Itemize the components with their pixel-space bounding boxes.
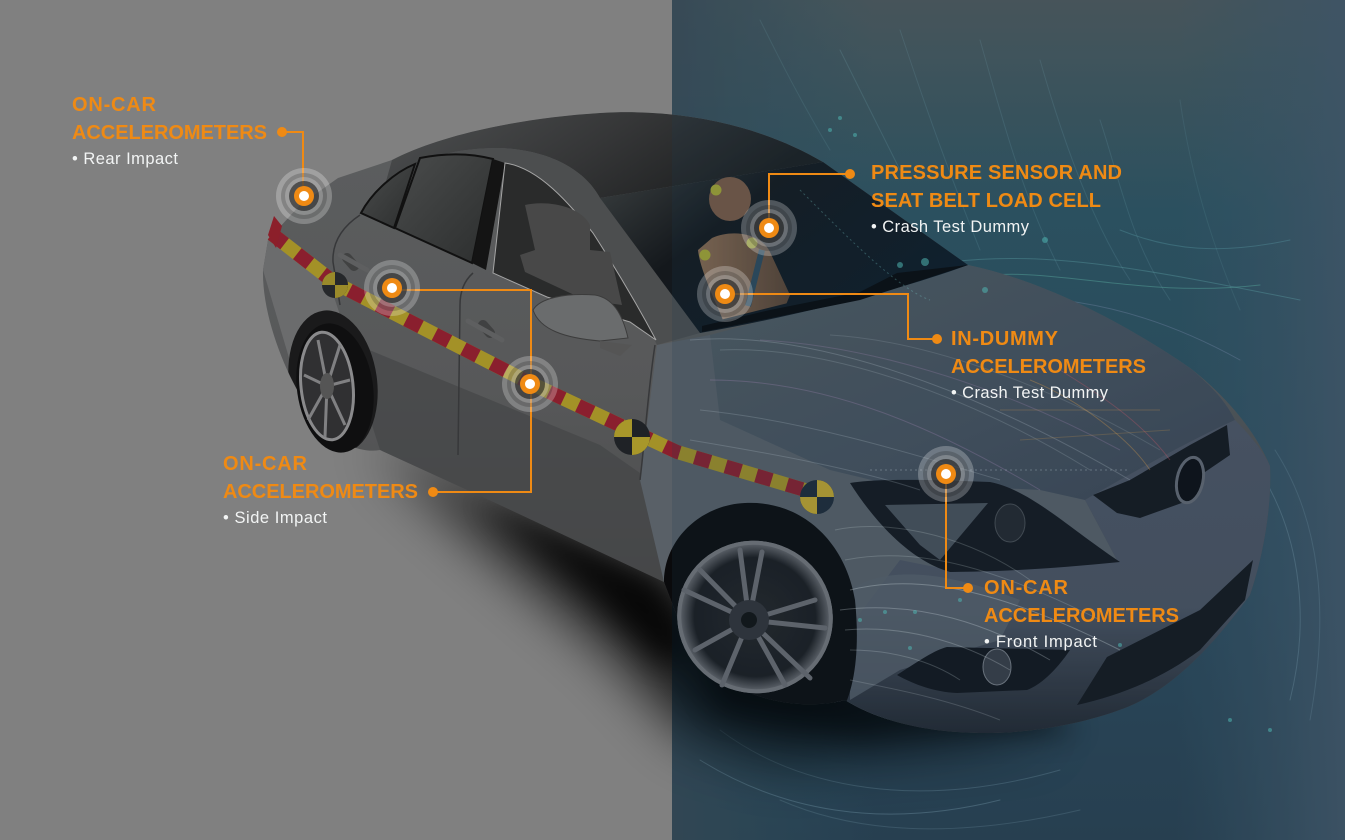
label: • Crash Test Dummy <box>871 218 1030 236</box>
seat <box>520 203 622 305</box>
door seams <box>333 215 655 480</box>
front bumper <box>845 420 1270 733</box>
roof panel <box>385 112 823 198</box>
label: SEAT BELT LOAD CELL <box>871 190 1101 212</box>
label: • Side Impact <box>223 509 327 527</box>
crash marker door <box>614 419 650 455</box>
label <box>871 162 1122 236</box>
sensor target <box>741 200 797 256</box>
lower air intake <box>897 560 1253 705</box>
sensor target lower <box>502 356 558 412</box>
car body shell <box>263 112 1270 733</box>
grille <box>1093 425 1230 518</box>
seat belt <box>748 250 762 306</box>
label: PRESSURE SENSOR AND <box>871 162 1122 184</box>
car <box>263 112 1270 735</box>
connector line <box>725 294 937 339</box>
connector dot <box>963 583 973 593</box>
sensor target upper <box>364 260 420 316</box>
dummy head <box>709 177 751 221</box>
label: • Front Impact <box>984 633 1097 651</box>
label <box>984 577 1179 651</box>
hood panel <box>710 265 1235 500</box>
A pillar and roof rail <box>412 148 700 345</box>
callout: rear impact sensor <box>72 94 332 224</box>
label: • Crash Test Dummy <box>951 384 1109 402</box>
callout: in-dummy accelerometers <box>697 266 1146 402</box>
rear rim <box>295 330 359 442</box>
connector dot <box>277 127 287 137</box>
door handles <box>340 255 502 340</box>
rear wheel arch <box>288 310 378 448</box>
label: IN-DUMMY <box>951 328 1059 350</box>
label: ACCELEROMETERS <box>984 605 1179 627</box>
lower flank darkening <box>370 350 641 490</box>
car ground shadow <box>370 440 1080 760</box>
label <box>223 453 418 527</box>
data particles <box>828 116 1272 732</box>
dummy shoulder marker <box>700 250 710 260</box>
dummy head marker <box>710 184 722 196</box>
windshield <box>600 162 968 333</box>
background: grey left half <box>0 0 672 840</box>
connector dot <box>845 169 855 179</box>
side mirror <box>533 295 632 356</box>
label: ACCELEROMETERS <box>951 356 1146 378</box>
label: ON-CAR <box>223 453 308 475</box>
label: ON-CAR <box>984 577 1069 599</box>
callout: pressure sensor and seat belt load cell <box>741 162 1122 256</box>
dummy chest marker <box>746 238 758 248</box>
crash marker fender <box>800 480 834 514</box>
connector line <box>946 474 968 588</box>
lower fender light <box>850 574 1020 700</box>
background: teal data field right half <box>672 0 1345 840</box>
label: ACCELEROMETERS <box>72 122 267 144</box>
callout: front impact sensor <box>918 446 1179 651</box>
connector dot <box>932 334 942 344</box>
callout: side impact sensors <box>223 260 558 527</box>
connector dot <box>428 487 438 497</box>
headlight <box>850 480 1120 572</box>
connector line <box>769 174 850 228</box>
front rim <box>656 519 854 715</box>
flow lines over car <box>690 190 1170 720</box>
rear flank light <box>263 240 340 358</box>
connector line <box>282 132 303 196</box>
sensor target <box>697 266 753 322</box>
label <box>951 328 1146 402</box>
rear tyre <box>288 318 382 458</box>
data streaks on background <box>700 20 1320 829</box>
sensor target <box>276 168 332 224</box>
label <box>72 94 267 168</box>
label: ON-CAR <box>72 94 157 116</box>
right half tint over car <box>672 0 1345 840</box>
front fender <box>640 335 1118 735</box>
label: • Rear Impact <box>72 150 178 168</box>
front wheel arch <box>664 503 857 715</box>
wipers <box>702 265 968 332</box>
sensor target <box>918 446 974 502</box>
car body panels <box>263 112 1270 735</box>
crash marker rear <box>322 272 348 298</box>
connector line <box>392 290 531 492</box>
side windows <box>361 154 656 340</box>
dummy torso <box>698 233 790 325</box>
hazard tape stripe <box>268 216 805 490</box>
label: ACCELEROMETERS <box>223 481 418 503</box>
crash test dummy <box>698 177 790 325</box>
